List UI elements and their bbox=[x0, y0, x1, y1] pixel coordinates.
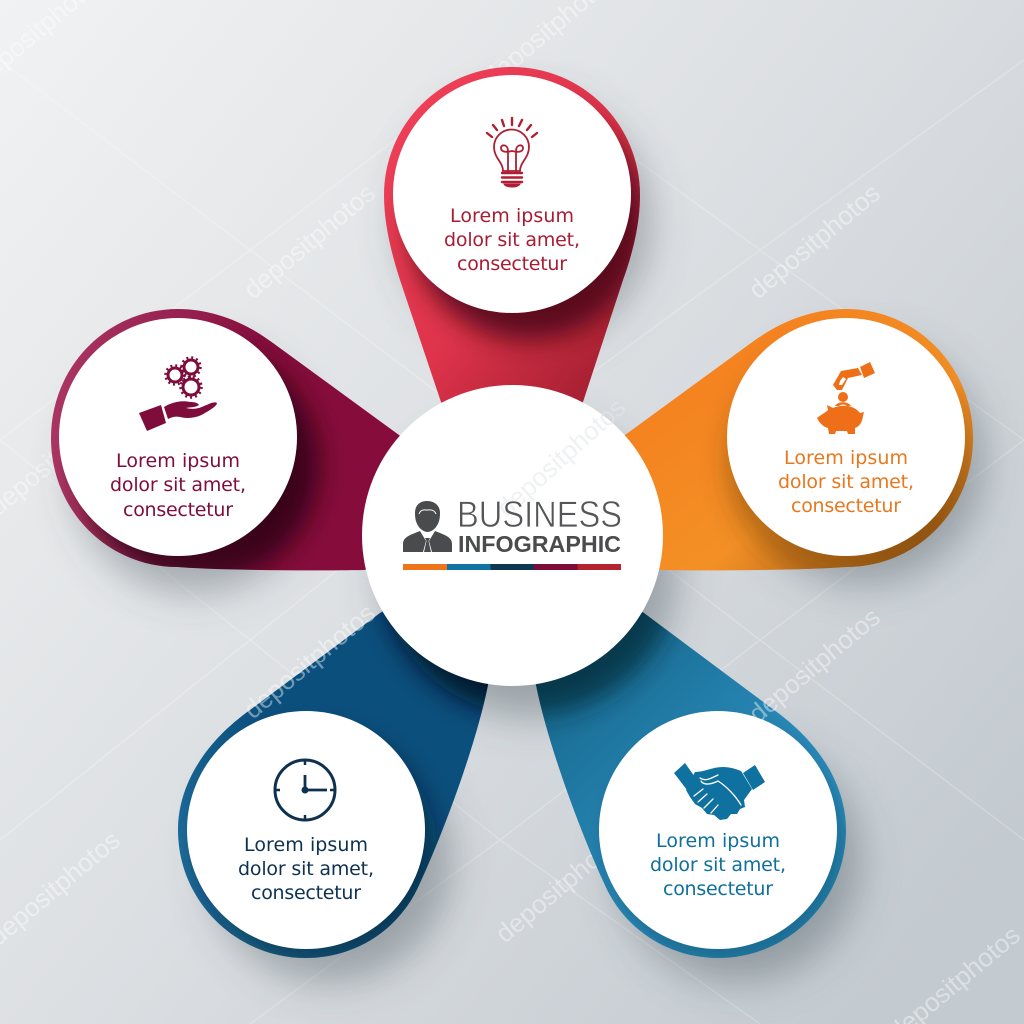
text: top card: dolor sit amet, bbox=[444, 229, 580, 251]
card: right, savings bbox=[727, 318, 965, 556]
petal: top red bbox=[384, 67, 640, 403]
text: top card: Lorem ipsum bbox=[450, 205, 574, 227]
text: top card: consectetur bbox=[457, 253, 567, 275]
petal: left maroon bbox=[51, 309, 400, 570]
text: bottom-left card: dolor sit amet, bbox=[238, 858, 374, 880]
card: bottom-right, partnership bbox=[599, 711, 837, 949]
center circle with title bbox=[362, 385, 663, 686]
card: bottom-left, time bbox=[187, 711, 425, 949]
soft shadows on background bbox=[73, 97, 984, 982]
title: business: BUSINESS bbox=[457, 494, 622, 535]
text: bottom-right card: dolor sit amet, bbox=[650, 854, 786, 876]
text: right card: dolor sit amet, bbox=[778, 471, 914, 493]
card: left, ideas in hand bbox=[59, 318, 297, 556]
petal: bottom-left navy bbox=[178, 608, 488, 958]
text: bottom-left card: consectetur bbox=[251, 882, 361, 904]
text: left card: Lorem ipsum bbox=[116, 450, 240, 472]
colour strip bbox=[403, 564, 621, 570]
petal: right orange bbox=[624, 309, 973, 570]
icon: handshake bbox=[674, 763, 765, 820]
text: bottom-right card: consectetur bbox=[663, 878, 773, 900]
icon: clock bbox=[275, 760, 335, 820]
text: right card: consectetur bbox=[791, 495, 901, 517]
watermark text: depositphotos bbox=[238, 178, 381, 305]
text: bottom-left card: Lorem ipsum bbox=[244, 834, 368, 856]
icon: businessman bbox=[403, 501, 452, 552]
title: infographic: INFOGRAPHIC bbox=[458, 531, 621, 557]
center circle with title: depositphotos bbox=[491, 392, 631, 523]
watermark on petal: depositphotos bbox=[238, 598, 381, 725]
icon: light bulb bbox=[487, 118, 537, 187]
text: left card: dolor sit amet, bbox=[110, 474, 246, 496]
icon: hand holding gears bbox=[139, 358, 217, 431]
watermark text: depositphotos bbox=[490, 822, 633, 949]
watermark on petal: depositphotos bbox=[743, 602, 886, 729]
petal: bottom-right blue bbox=[536, 612, 880, 958]
text: left card: consectetur bbox=[123, 499, 233, 521]
watermark text: depositphotos bbox=[743, 178, 886, 305]
icon: hand dropping coin in piggy bank bbox=[817, 362, 875, 434]
text: right card: Lorem ipsum bbox=[784, 447, 908, 469]
card: top, innovation bbox=[393, 75, 631, 313]
text: bottom-right card: Lorem ipsum bbox=[656, 830, 780, 852]
